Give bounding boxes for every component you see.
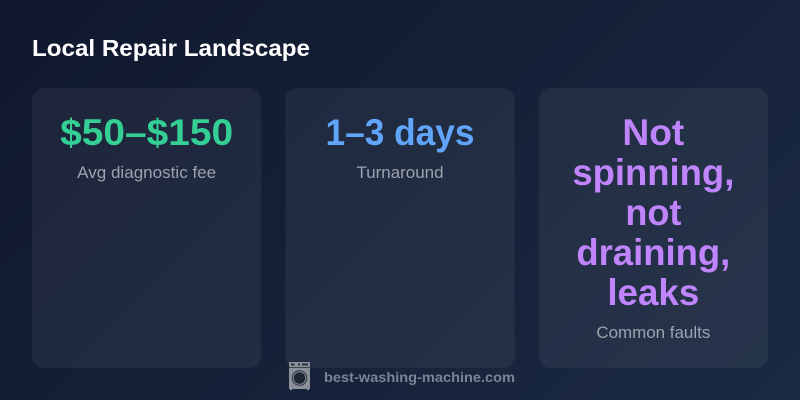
value: common faults: leaks xyxy=(607,271,699,313)
value: common faults: Not xyxy=(622,111,685,153)
panel: turnaround xyxy=(285,88,515,368)
icon: washing machine xyxy=(289,362,310,390)
value: common faults xyxy=(572,111,734,313)
label: common faults: Common faults xyxy=(596,324,710,342)
panel: diagnostic fee xyxy=(32,88,261,368)
value: turnaround: 1–3 days xyxy=(326,111,474,153)
panel: common faults xyxy=(539,88,768,368)
value: common faults: not xyxy=(625,191,682,233)
value: common faults: draining, xyxy=(576,231,730,273)
footer site name: best-washing-machine.com xyxy=(324,369,515,385)
value: common faults: spinning, xyxy=(572,151,734,193)
label: turnaround: Turnaround xyxy=(356,164,444,182)
value: diagnostic fee: $50–$150 xyxy=(60,111,233,153)
label: diagnostic fee: Avg diagnostic fee xyxy=(77,164,216,182)
title: Local Repair Landscape xyxy=(32,35,310,61)
